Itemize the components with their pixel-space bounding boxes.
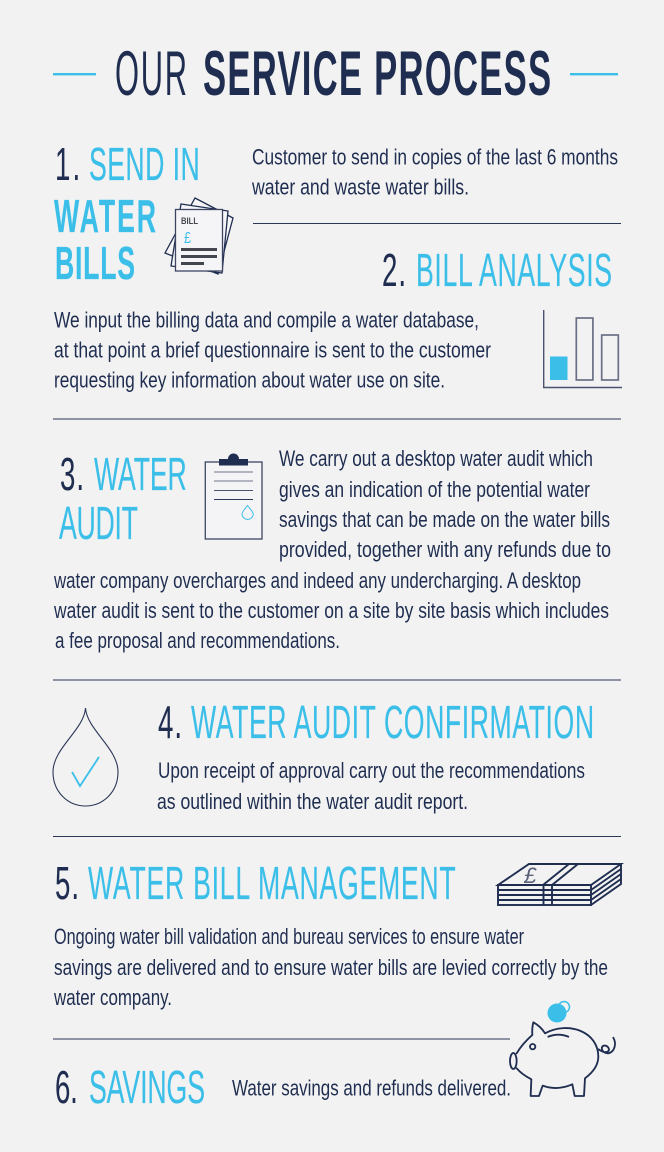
text block: step 2 (54, 308, 491, 392)
heading: step 2: 2. (382, 246, 406, 297)
icon: water bill (165, 198, 233, 274)
heading: step 5: 5. (55, 859, 79, 910)
text block: step 3: gives an indication of the potential water (279, 477, 590, 502)
heading: step 3: WATER (94, 448, 187, 500)
text block: step 5: water company. (53, 985, 172, 1010)
panel: step 4 water audit confirmation (53, 696, 594, 814)
text block: step 1: water and waste water bills. (251, 174, 469, 200)
heading: step 1: BILLS (55, 237, 135, 289)
panel: step 6 savings (55, 1002, 615, 1114)
heading: step 4: 4. (158, 698, 182, 749)
heading: step 1 (54, 138, 200, 289)
heading: step 3: 3. (60, 450, 84, 501)
text block: step 2: We input the billing data and compile a water database, (54, 308, 479, 332)
text block: step 4: as outlined within the water audit report. (157, 789, 468, 814)
text block: step 5 (53, 924, 608, 1010)
icon: stack of banknotes (498, 863, 621, 905)
heading: step 2: BILL ANALYSIS (416, 244, 612, 296)
heading: step 3 (59, 448, 187, 549)
text block: step 4 (157, 758, 585, 814)
heading: step 5: WATER BILL MANAGEMENT (88, 857, 456, 909)
panel: step 1 send in water bills (54, 138, 618, 289)
icon: clipboard (205, 454, 262, 539)
title: SERVICE PROCESS (203, 38, 551, 109)
heading: step 3: AUDIT (59, 497, 138, 549)
text block: step 6: Water savings and refunds delivered. (232, 1076, 511, 1100)
text block: step 2: at that point a brief questionnaire is sent to the customer (54, 338, 491, 362)
heading: step 6: SAVINGS (89, 1061, 205, 1113)
title (53, 38, 618, 109)
text block: step 2: requesting key information about water use on site. (54, 368, 445, 392)
title: OUR (115, 38, 187, 109)
text block: step 3: a fee proposal and recommendations. (55, 628, 340, 653)
panel: step 5 water bill management (53, 857, 621, 1010)
heading: step 1: 1. (55, 140, 80, 191)
icon: stack of banknotes: £ (523, 863, 537, 888)
panel: step 2 bill analysis (54, 244, 622, 392)
icon: piggy bank with coins (510, 1002, 615, 1096)
text block: step 1 (251, 144, 618, 200)
icon: bar chart (544, 310, 622, 388)
panel: step 3 water audit (53, 446, 611, 653)
heading: step 6: 6. (55, 1063, 78, 1114)
heading: step 4: WATER AUDIT CONFIRMATION (191, 696, 594, 748)
icon: water bill: BILL (181, 216, 198, 226)
heading: step 1: SEND IN (89, 138, 200, 190)
heading: step 1: WATER (54, 190, 156, 242)
icon: water bill: £ (184, 230, 191, 247)
icon: water drop with tick (53, 708, 118, 806)
text block: step 3 (53, 446, 611, 653)
